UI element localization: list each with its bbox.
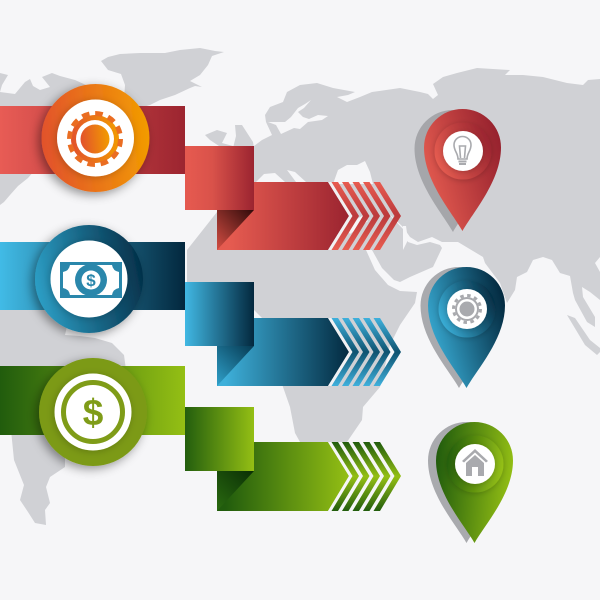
icon: gray gear	[454, 296, 480, 322]
blue band	[0, 242, 185, 310]
map: UK	[205, 130, 233, 148]
pin: green house	[428, 422, 513, 543]
blue ring	[35, 225, 143, 333]
blue middle panel	[185, 282, 254, 346]
pin body	[436, 422, 513, 543]
icon: banknote: $	[86, 271, 96, 290]
map: Central America	[0, 305, 126, 370]
red middle panel	[185, 146, 254, 210]
world map	[0, 48, 600, 525]
icon: lightbulb	[454, 137, 471, 164]
white disc	[50, 240, 128, 318]
icon: house	[462, 449, 488, 476]
pin white disc	[455, 444, 495, 484]
badge: banknote	[35, 225, 143, 333]
green arrow edge	[328, 442, 352, 511]
map: Arctic Canada	[0, 73, 86, 110]
orange ring	[42, 84, 150, 192]
pin shadow	[414, 110, 492, 232]
pin inner ring	[438, 280, 496, 338]
blue fold	[217, 346, 254, 386]
sea: Mediterranean centre	[287, 170, 306, 182]
sea: tip wedge	[403, 226, 408, 250]
green arrow chevrons	[332, 442, 401, 511]
ribbon: red	[0, 106, 401, 250]
pin: blue gear	[420, 267, 505, 388]
ribbon: blue	[0, 242, 401, 386]
pin shadow	[428, 422, 505, 543]
pin shadow	[420, 267, 498, 388]
red arrow chevrons	[332, 182, 401, 250]
green band	[0, 366, 185, 435]
map: Africa and Arabia	[187, 200, 442, 442]
badge: dollar coin	[39, 358, 147, 466]
badge: gear	[42, 84, 150, 192]
green fold	[217, 471, 254, 511]
sea: Black Sea	[345, 216, 368, 234]
map: Malay strip	[567, 315, 600, 355]
icon: orange gear	[70, 114, 120, 164]
red fold	[217, 210, 254, 250]
sea: Mediterranean west	[256, 173, 285, 182]
map: North America lower	[0, 170, 35, 205]
ribbon: green	[0, 366, 401, 511]
sea: Baltic	[268, 100, 328, 134]
pin inner ring	[446, 436, 504, 492]
pin: red lightbulb	[414, 109, 501, 232]
pin body	[428, 267, 505, 388]
white disc	[54, 374, 132, 450]
pin white disc	[447, 289, 487, 329]
map: Greenland	[101, 48, 224, 120]
map seas	[256, 100, 408, 291]
white disc	[57, 100, 134, 176]
map: Eurasia	[254, 68, 600, 327]
red band	[0, 106, 185, 174]
green middle panel	[185, 407, 254, 471]
blue arrow edge	[328, 318, 352, 386]
green ring	[39, 358, 147, 466]
pin white disc	[443, 131, 483, 171]
pin body	[424, 109, 501, 231]
blue arrow chevrons	[332, 318, 401, 386]
map: Scandinavia islands	[233, 125, 254, 148]
sea: Red Sea	[366, 250, 400, 291]
blue arrow body	[217, 318, 349, 386]
sea: Mediterranean east	[333, 161, 373, 184]
red arrow edge	[328, 182, 352, 250]
map: South America	[11, 430, 65, 525]
green arrow body	[217, 442, 349, 511]
red arrow body	[217, 182, 349, 250]
icon: dollar coin: $	[83, 392, 104, 433]
pin inner ring	[434, 122, 492, 180]
